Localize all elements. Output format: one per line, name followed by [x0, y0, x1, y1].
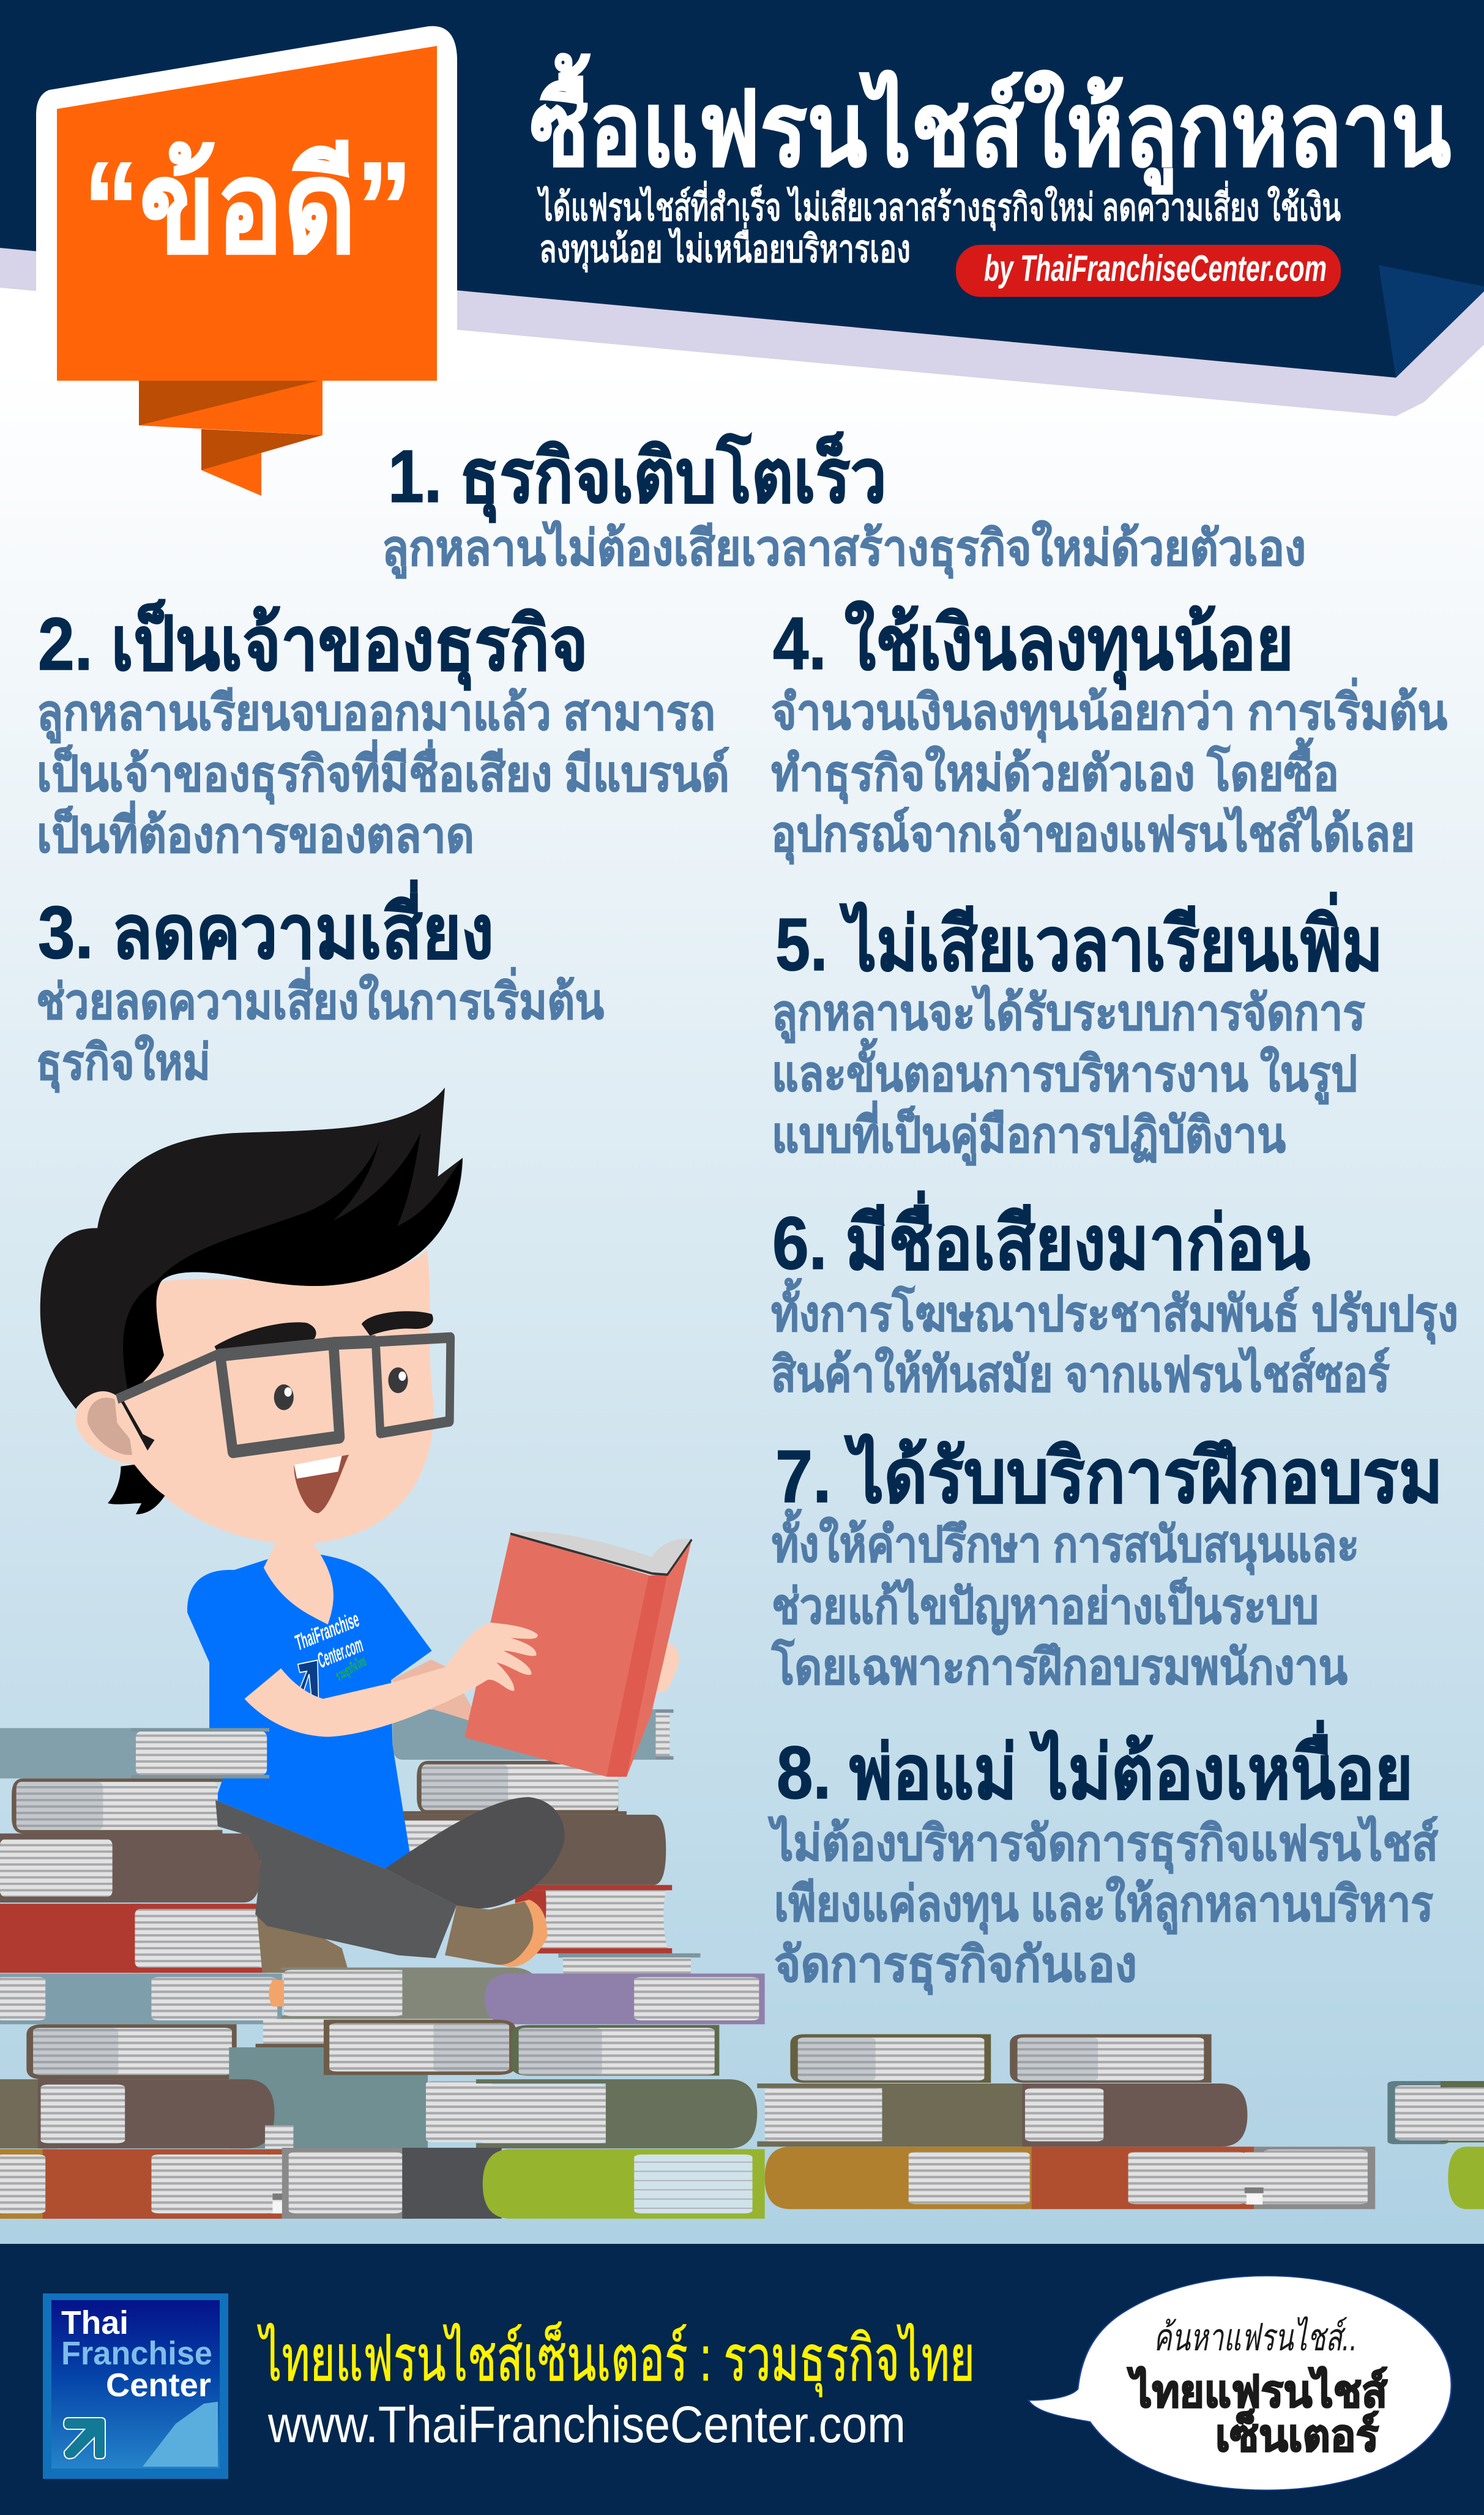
bubble brand name: ไทยแฟรนไชส์ [1127, 2366, 1387, 2416]
shirt logo [293, 1606, 368, 1685]
boy: eyebrows [215, 1311, 433, 1358]
item 4 heading: 4. ใช้เงินลงทุนน้อย [773, 600, 1294, 690]
item 2 body: ลูกหลานเรียนจบออกมาแล้ว สามารถ [37, 686, 715, 744]
footer logo [43, 2293, 228, 2479]
boy: arm and hand [244, 1623, 538, 1737]
stack row 3 [0, 2079, 1484, 2148]
shirt logo: Center.com [315, 1631, 365, 1673]
item 7 [771, 1434, 1443, 1694]
speech bubble [1029, 2276, 1452, 2490]
item 6 heading: 6. มีชื่อเสียงมาก่อน [772, 1190, 1310, 1285]
item 5 heading: 5. ไม่เสียเวลาเรียนเพิ่ม [775, 892, 1383, 986]
subtitle [537, 181, 1341, 272]
shirt logo: ThaiFranchise [293, 1606, 362, 1655]
stack row 1 [0, 1953, 765, 2024]
item 3 body: ธุรกิจใหม่ [36, 1034, 211, 1093]
item 3 body [36, 967, 604, 1093]
red credit pill: by ThaiFranchiseCenter.com [984, 248, 1327, 289]
item 3 body: ช่วยลดความเสี่ยงในการเริ่มต้น [36, 967, 604, 1029]
item 2 heading: 2. เป็นเจ้าของธุรกิจ [38, 599, 588, 690]
orange banner [36, 26, 457, 496]
item 4 body: ทำธุรกิจใหม่ด้วยตัวเอง โดยซื้อ [771, 738, 1339, 804]
stack row 2 [26, 2019, 1212, 2148]
boy: neck [264, 1542, 334, 1624]
logo wordmark: Thai [61, 2304, 129, 2341]
boy: eyes [274, 1367, 408, 1410]
item 6 [771, 1190, 1458, 1402]
item 7 body: ทั้งให้คำปรึกษา การสนับสนุนและ [772, 1509, 1359, 1575]
item 6 body [771, 1278, 1458, 1402]
item 7 body: โดยเฉพาะการฝึกอบรมพนักงาน [771, 1638, 1348, 1694]
boy: mouth [294, 1455, 349, 1513]
footer band [0, 2244, 1484, 2515]
boy: neck lock of hair [108, 1465, 165, 1514]
item 7 body: ช่วยแก้ไขปัญหาอย่างเป็นระบบ [772, 1577, 1319, 1635]
item 2 [37, 599, 729, 862]
item 2 body: เป็นที่ต้องการของตลาด [37, 801, 474, 862]
boy: shirt [187, 1554, 432, 1869]
boy: hair [40, 1088, 463, 1451]
book stacks foreground [0, 1953, 1484, 2219]
boy: shoes [256, 1900, 547, 1973]
page background [0, 367, 1484, 2246]
item 2 body: เป็นเจ้าของธุรกิจที่มีชื่อเสียง มีแบรนด์ [37, 739, 729, 805]
boy: ear [76, 1388, 145, 1466]
banner word: “ข้อดี” [83, 135, 412, 280]
item 4 [771, 600, 1447, 865]
fingers behind book [654, 1644, 679, 1692]
item 8 body: จัดการธุรกิจกันเอง [774, 1937, 1137, 1995]
item 5 body [772, 984, 1365, 1166]
logo wordmark: Franchise [61, 2335, 212, 2372]
item 5 [772, 892, 1383, 1166]
item 5 body: แบบที่เป็นคู่มือการปฏิบัติงาน [772, 1101, 1286, 1166]
item 8 body [767, 1815, 1438, 1995]
books behind the boy, right [392, 1710, 674, 1954]
bubble brand name: เซ็นเตอร์ [1215, 2409, 1379, 2461]
logo wordmark: Center [106, 2367, 211, 2404]
item 7 body [771, 1509, 1359, 1694]
logo arrow [64, 2418, 105, 2459]
bubble small text: ค้นหาแฟรนไชส์.. [1154, 2316, 1357, 2359]
item 1 body: ลูกหลานไม่ต้องเสียเวลาสร้างธุรกิจใหม่ด้วยตัวเอง [382, 520, 1306, 579]
footer heading: ไทยแฟรนไชส์เซ็นเตอร์ : รวมธุรกิจไทย [257, 2321, 975, 2397]
item 1 heading: 1. ธุรกิจเติบโตเร็ว [388, 432, 887, 523]
item 8 heading: 8. พ่อแม่ ไม่ต้องเหนื่อย [777, 1720, 1413, 1814]
item 2 body [37, 686, 729, 862]
red credit pill [956, 245, 1341, 297]
item 1 [382, 432, 1306, 579]
item 5 body: ลูกหลานจะได้รับระบบการจัดการ [772, 984, 1365, 1044]
shirt logo: รวมธุรกิจไทย [334, 1652, 368, 1685]
stack row 4 [0, 2147, 1484, 2219]
item 5 body: และขั้นตอนการบริหารงาน ในรูป [772, 1038, 1357, 1105]
boy: hidden forearm [391, 1659, 473, 1721]
bubble brand name [1127, 2366, 1387, 2461]
footer url: www.ThaiFranchiseCenter.com [267, 2396, 906, 2453]
item 3 [36, 880, 604, 1093]
logo wordmark [61, 2304, 212, 2404]
open red book [464, 1531, 692, 1777]
boy: glasses [117, 1337, 450, 1452]
books in front, left [0, 1728, 269, 1973]
boy: head [124, 1250, 434, 1544]
item 4 body [771, 678, 1447, 865]
item 8 [767, 1720, 1438, 1995]
illustration: boy reading on stacks of books [0, 1088, 692, 1973]
boy: legs [215, 1797, 565, 1958]
header navy band [0, 0, 1484, 416]
item 3 heading: 3. ลดความเสี่ยง [38, 880, 494, 974]
subtitle: ลงทุนน้อย ไม่เหนื่อยบริหารเอง [539, 222, 911, 272]
